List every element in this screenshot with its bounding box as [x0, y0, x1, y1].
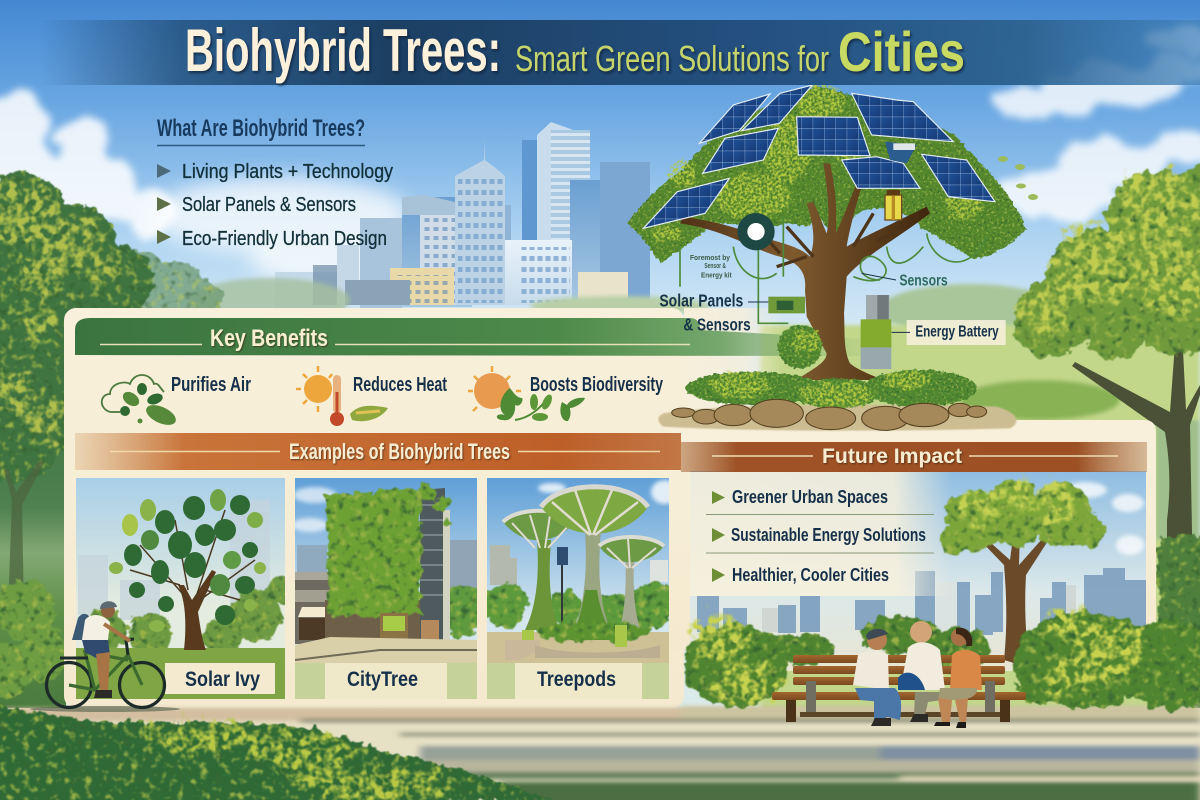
left lower bushes — [0, 580, 71, 698]
icon: glowing lantern — [885, 190, 902, 220]
panel: main cream background — [64, 308, 1156, 708]
bench — [772, 655, 1026, 722]
right tree trunk and branches — [1072, 330, 1200, 700]
bullet 1: Greener Urban Spaces — [732, 487, 888, 507]
right tree canopy — [1012, 165, 1200, 360]
title: Biohybrid Trees: — [185, 17, 501, 84]
grass field right — [760, 325, 1200, 720]
sensors label: Sensors — [899, 273, 948, 290]
right tree highlights — [1019, 168, 1200, 336]
key benefits header band — [75, 318, 880, 356]
right lower bush — [1158, 535, 1200, 710]
ground: road and foreground — [0, 706, 1200, 800]
city skyline — [275, 122, 650, 312]
examples header band — [75, 433, 681, 470]
solar ivy label: Solar Ivy — [185, 668, 260, 691]
bullet 2: Sustainable Energy Solutions — [731, 525, 926, 545]
banner band — [40, 20, 1200, 85]
treepods illustration — [487, 478, 669, 663]
bullet: solar panels: Solar Panels & Sensors — [182, 194, 356, 216]
solar panel array — [643, 85, 995, 228]
left tree canopy — [0, 173, 154, 482]
bullet: living plants: Living Plants + Technology — [182, 161, 393, 183]
icon: energy battery — [861, 295, 891, 369]
tiny sign text — [690, 253, 732, 279]
bicycle wheels and frame — [30, 639, 180, 712]
citytree label — [295, 663, 477, 699]
solar ivy illustration — [76, 478, 285, 663]
future impact title: Future Impact — [822, 445, 962, 468]
foreground bush highlights — [150, 722, 450, 800]
cables — [680, 217, 987, 323]
left tree highlights — [0, 181, 121, 438]
boosts biodiversity label: Boosts Biodiversity — [530, 374, 664, 396]
title — [185, 17, 965, 84]
energy battery label: Energy Battery — [915, 324, 999, 341]
solar ivy label — [76, 663, 285, 699]
bush masses — [683, 612, 1200, 710]
tree branches and trunk — [680, 163, 930, 380]
tree: main biohybrid tree with solar panels — [627, 83, 1027, 431]
citytree label: CityTree — [347, 668, 418, 691]
key benefits title: Key Benefits — [210, 325, 328, 352]
rocks — [672, 399, 987, 430]
title banner — [40, 17, 1200, 85]
tree: right background — [1012, 165, 1200, 710]
icon: cloud and leaves — [102, 375, 179, 429]
cyclist on bicycle — [30, 601, 180, 712]
person 3 — [934, 628, 982, 728]
tree: left background — [0, 173, 223, 710]
bench with three people — [772, 621, 1026, 728]
panel: What Are Biohybrid Trees — [157, 115, 393, 250]
distant hills and hedge — [190, 278, 1060, 336]
title: Cities — [838, 20, 965, 83]
what are heading: What Are Biohybrid Trees? — [157, 115, 365, 142]
icon: sun, butterfly and sprig — [468, 366, 585, 421]
label pointers — [748, 273, 910, 332]
energy battery label — [907, 320, 1006, 345]
floating leaves — [998, 156, 1038, 200]
icon: round sensor light — [737, 213, 775, 250]
icon: sensor box under panel — [885, 142, 917, 163]
tiny sign text: Sensor & — [704, 261, 726, 270]
junction box — [768, 297, 805, 313]
clouds left — [0, 87, 174, 236]
panel: Future Impact — [681, 442, 1147, 671]
treepods label — [487, 663, 669, 699]
left tree trunk — [4, 460, 44, 610]
clouds right — [990, 24, 1200, 217]
card: Solar Ivy — [76, 478, 294, 699]
person 1 — [853, 629, 901, 726]
tree: future impact — [939, 477, 1103, 668]
treepods label: Treepods — [537, 668, 616, 691]
future impact header band — [681, 442, 1147, 472]
tiny sign text: Energy kit — [701, 270, 732, 279]
tree canopy — [627, 87, 1027, 263]
tiny sign text: Foremost by — [690, 253, 731, 262]
title: Smart Green Solutions for — [515, 38, 829, 79]
bullet: eco-friendly: Eco-Friendly Urban Design — [182, 228, 387, 250]
future impact illustration background — [690, 471, 1146, 671]
card: Treepods — [483, 478, 679, 699]
rider — [72, 601, 130, 698]
citytree illustration — [295, 478, 477, 663]
bushes behind bench — [683, 609, 1200, 710]
icon: sun and thermometer — [296, 366, 388, 426]
foreground bush mass — [0, 705, 555, 800]
panel: Key Benefits — [75, 318, 880, 429]
person 2 — [898, 621, 945, 722]
ground soil — [658, 405, 1016, 431]
canopy highlights — [652, 83, 983, 242]
card: CityTree — [292, 478, 488, 699]
solar panels and sensors label — [659, 291, 751, 334]
reduces heat label: Reduces Heat — [353, 374, 447, 396]
bush highlights — [690, 609, 1146, 703]
plants highlights — [710, 330, 928, 408]
panel: Examples of Biohybrid Trees — [75, 433, 681, 699]
future impact list — [690, 472, 952, 596]
solar panels and sensors label: & Sensors — [683, 314, 751, 334]
foreground bushes bottom left — [0, 705, 555, 800]
soft haze behind intro text — [150, 177, 430, 286]
plants at tree base — [685, 325, 977, 408]
purifies air label: Purifies Air — [171, 374, 251, 396]
examples title: Examples of Biohybrid Trees — [289, 439, 510, 464]
bullet 3: Healthier, Cooler Cities — [732, 565, 889, 585]
left hazy far foliage — [103, 248, 223, 320]
solar panels and sensors label: Solar Panels — [659, 291, 743, 311]
